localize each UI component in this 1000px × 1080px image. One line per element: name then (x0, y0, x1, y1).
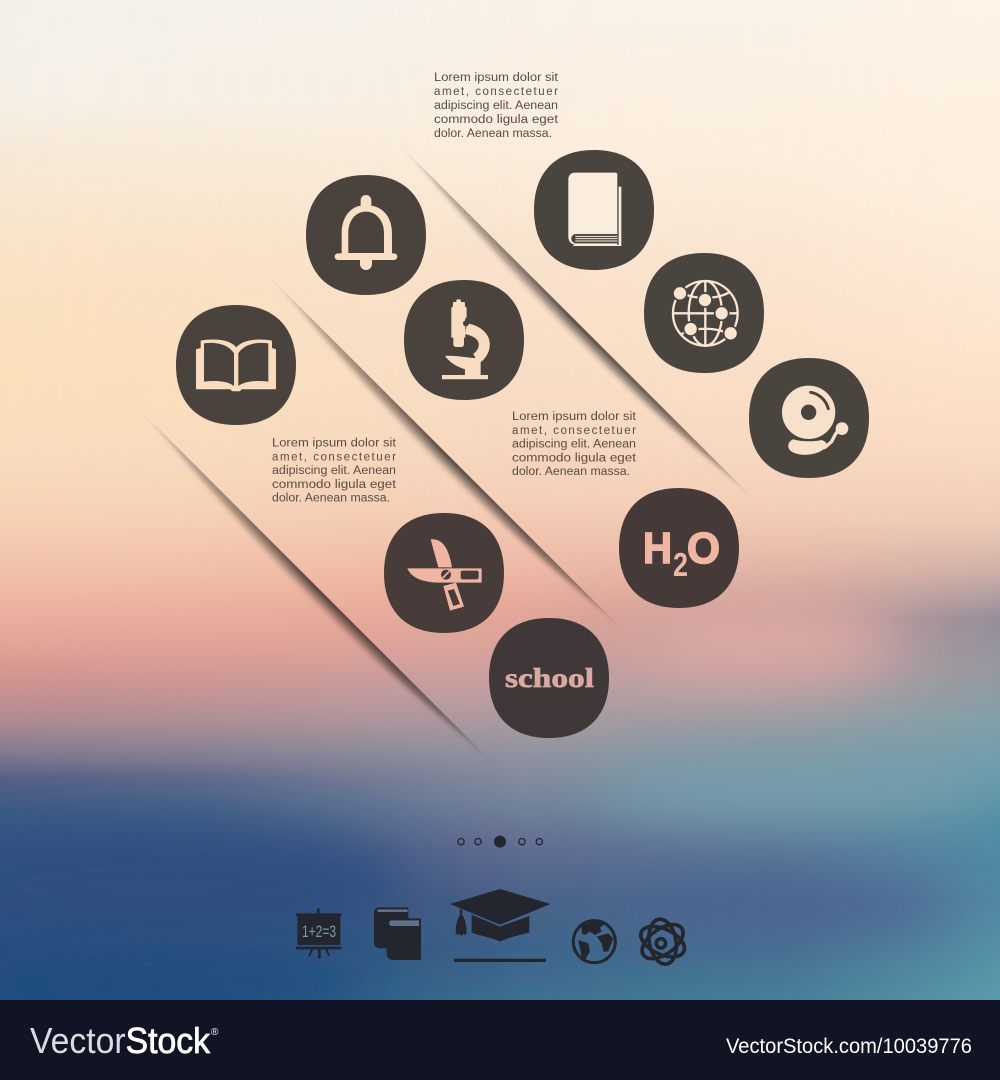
icon: H2O formula: H (643, 524, 672, 573)
text block: top: commodo ligula eget (434, 114, 559, 126)
logo: VectorStock: VectorStock (30, 1020, 211, 1061)
text block: top: amet, consectetuer (434, 86, 558, 98)
icon: pocket knife (384, 513, 504, 633)
icon: H2O formula: 2 (673, 546, 688, 583)
icon: H2O formula: O (687, 524, 720, 573)
fold shadow: middle band (278, 285, 616, 623)
icon: H2O formula (619, 488, 739, 608)
text block: left: commodo ligula eget (272, 479, 397, 491)
pagination dots (458, 836, 542, 847)
text block: centre: amet, consectetuer (512, 425, 636, 437)
icon: closed book (534, 150, 654, 270)
icon: blackboard: 1+2=3 (302, 922, 336, 941)
icon: microscope (404, 280, 524, 400)
fold shadow: top band (407, 152, 746, 492)
icon: open book (176, 305, 296, 425)
fold shadow: lower band (148, 418, 483, 754)
image id: VectorStock.com/10039776 (726, 1035, 972, 1058)
icon: hand bell (306, 175, 426, 295)
text block: centre: Lorem ipsum dolor sit (512, 411, 637, 423)
icon: earth (573, 921, 615, 963)
text block: top (434, 72, 559, 140)
icon: blackboard (296, 908, 342, 959)
text block: top: adipiscing elit. Aenean (434, 100, 558, 112)
text block: centre: adipiscing elit. Aenean (512, 438, 636, 450)
icon: alarm bell (749, 358, 869, 478)
text block: top: Lorem ipsum dolor sit (434, 72, 559, 84)
text block: left: Lorem ipsum dolor sit (272, 438, 397, 450)
footer bar (0, 1000, 1000, 1080)
icon: atom (636, 917, 689, 966)
icon: two books (374, 907, 421, 960)
icon: network globe (644, 253, 764, 373)
icon: school wordmark (489, 618, 609, 738)
text block: left (272, 438, 397, 504)
text block: top: dolor. Aenean massa. (434, 128, 552, 140)
text block: centre: commodo ligula eget (512, 452, 637, 464)
icon: graduation cap (450, 889, 551, 962)
text block: left: dolor. Aenean massa. (272, 492, 390, 504)
logo: VectorStock: ® (211, 1027, 219, 1038)
text block: left: adipiscing elit. Aenean (272, 465, 396, 477)
text block: centre: dolor. Aenean massa. (512, 466, 630, 478)
text block: centre (512, 411, 637, 478)
icon: school wordmark: school (505, 663, 595, 693)
text block: left: amet, consectetuer (272, 452, 396, 464)
